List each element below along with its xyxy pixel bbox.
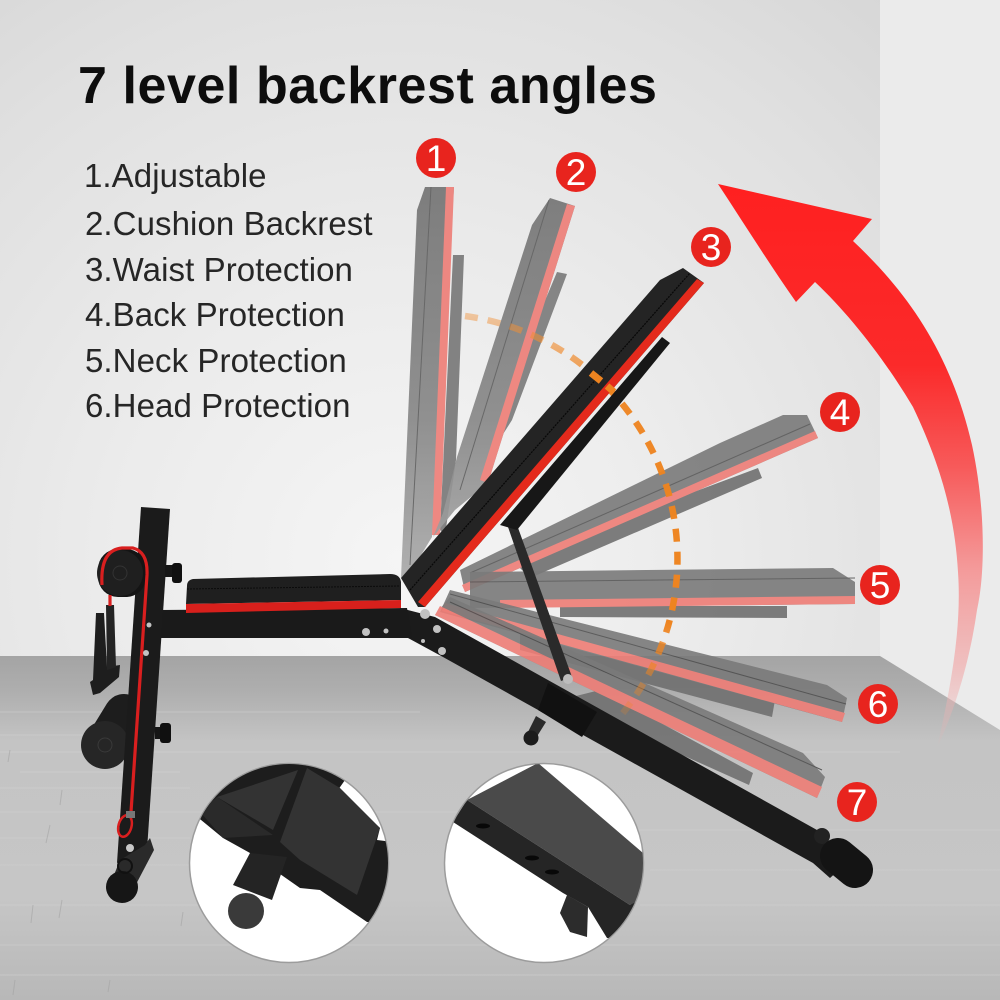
badge 7: 7 — [847, 782, 867, 823]
post foot — [106, 838, 154, 903]
knobs — [155, 563, 182, 743]
red band — [102, 548, 147, 812]
badge 6: 6 — [868, 684, 888, 725]
lower rail — [400, 608, 850, 878]
red curved arrow — [718, 184, 983, 748]
feature list: 5.Neck Protection — [85, 342, 347, 379]
badge 5: 5 — [870, 565, 890, 606]
backrest position 7 — [435, 597, 825, 798]
backrest position 6 — [440, 590, 847, 722]
adjust knob — [524, 716, 546, 746]
backrest position 2 — [433, 198, 575, 537]
badge 1 — [416, 138, 456, 179]
upright post — [117, 507, 170, 863]
badge 4 — [820, 392, 860, 433]
badge 1: 1 — [426, 138, 446, 179]
badge 2: 2 — [566, 152, 586, 193]
orange dashed arc — [465, 316, 677, 720]
feature list: 6.Head Protection — [85, 387, 351, 424]
floor — [0, 656, 1000, 1000]
backrest position 4 — [460, 415, 818, 592]
bolts — [143, 609, 446, 656]
seat pad — [186, 574, 401, 613]
rail foot — [814, 828, 855, 870]
resistance handles — [90, 605, 120, 695]
badge 3: 3 — [701, 227, 721, 268]
pulley — [97, 549, 146, 597]
feature list: 1.Adjustable — [84, 157, 267, 194]
badge 2 — [556, 152, 596, 193]
gas strut — [508, 525, 572, 681]
detail circle: frame holes — [444, 763, 650, 962]
feature list: 2.Cushion Backrest — [85, 205, 373, 242]
badge 4: 4 — [830, 392, 850, 433]
feature list: 4.Back Protection — [85, 296, 345, 333]
feature list — [84, 157, 373, 424]
horizontal bar — [158, 608, 412, 638]
backrest position 3 — [401, 268, 704, 607]
wall — [0, 0, 880, 700]
detail circle: pop pin — [190, 750, 400, 962]
foam roller — [81, 714, 129, 769]
backrest position 5 — [470, 568, 855, 618]
backrest position 1 — [401, 187, 464, 578]
badge 6 — [858, 684, 898, 725]
number badges — [416, 138, 900, 823]
sleeve — [538, 683, 597, 737]
badge 7 — [837, 782, 877, 823]
main bench frame — [81, 507, 855, 903]
badge 3 — [691, 227, 731, 268]
badge 5 — [860, 565, 900, 606]
title: 7 level backrest angles — [78, 57, 657, 115]
feature list: 3.Waist Protection — [85, 251, 353, 288]
